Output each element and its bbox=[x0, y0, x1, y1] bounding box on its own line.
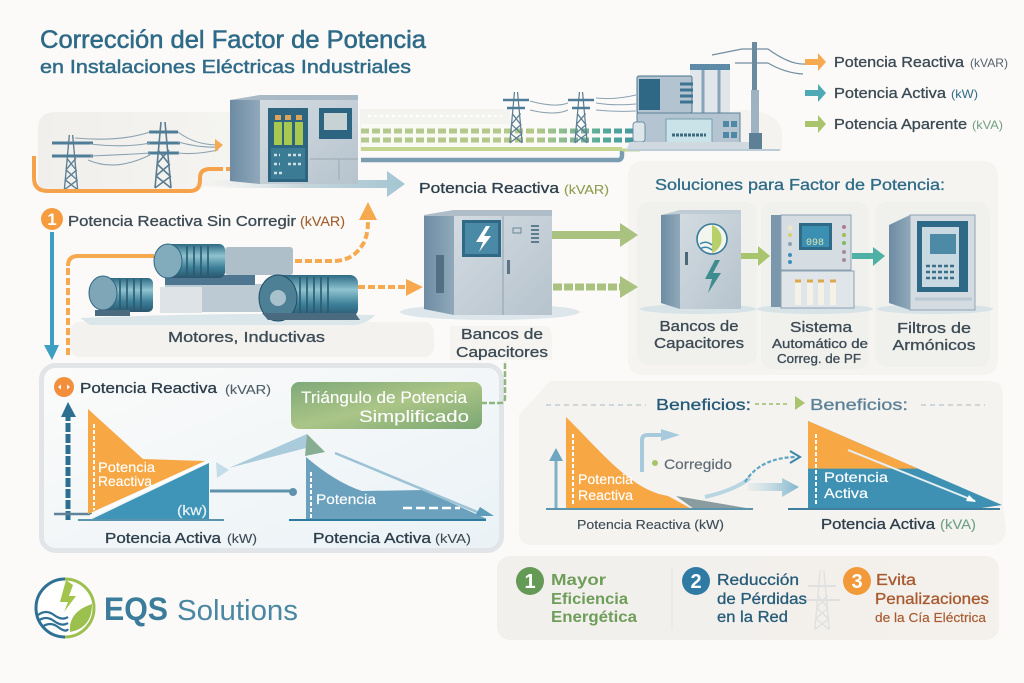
arrow: orange motor feed bbox=[68, 256, 154, 355]
title: en Instalaciones Eléctricas Industriales bbox=[40, 56, 411, 77]
panel: key benefits bbox=[497, 556, 999, 640]
callout: simplified triangle: Triángulo de Potencia bbox=[301, 389, 468, 407]
arrow: light blue up bbox=[640, 429, 680, 472]
chart: corrected triangle: Potencia bbox=[316, 491, 376, 507]
card labels: Automático de bbox=[772, 337, 868, 351]
arrow: solid green to solutions bbox=[552, 223, 638, 247]
label: capacitor banks bbox=[450, 326, 552, 361]
arrow: orange reactive flow bbox=[34, 156, 245, 191]
legend label: active: Potencia Activa bbox=[834, 86, 947, 102]
panel: power triangle bbox=[42, 361, 505, 550]
title bbox=[40, 26, 426, 77]
arrow: dashed curve bbox=[705, 451, 800, 497]
heading: reactive power: Potencia Reactiva bbox=[80, 381, 218, 397]
chart: uncorrected triangle: Potencia bbox=[98, 459, 155, 475]
heading: benefits: Beneficios: bbox=[810, 397, 908, 414]
chart: before: Potencia bbox=[578, 471, 633, 487]
axis labels: (kVA) bbox=[435, 531, 471, 546]
axis labels bbox=[577, 517, 976, 533]
benefit 1 bbox=[516, 567, 637, 626]
axis labels bbox=[105, 531, 471, 547]
chart: uncorrected triangle bbox=[78, 409, 224, 520]
benefit 3: de la Cía Eléctrica bbox=[875, 610, 987, 625]
arrow: dashed orange to capacitors bbox=[358, 279, 423, 296]
icon: motors bbox=[80, 244, 375, 325]
legend arrow: reactive bbox=[805, 53, 826, 71]
benefit 2: de Pérdidas bbox=[717, 591, 807, 608]
dashed connector bbox=[481, 361, 505, 403]
axis labels: Potencia Reactiva (kW) bbox=[577, 517, 724, 532]
chart: corrected triangle bbox=[289, 453, 494, 520]
badge and heading: uncorrected reactive power bbox=[41, 208, 345, 230]
icon: distant towers bbox=[503, 92, 636, 143]
arrow: grey flow to reactive power bbox=[200, 171, 405, 197]
arrow: blue down bbox=[44, 232, 59, 360]
chart: after: Potencia bbox=[824, 469, 888, 485]
arrow: dashed orange to main panel bbox=[295, 202, 377, 261]
label: reactive power top: (kVAR) bbox=[564, 182, 609, 197]
panel: benefits charts bbox=[519, 381, 1006, 545]
icon: capacitor bank cabinet bbox=[400, 210, 580, 320]
legend label: active: (kW) bbox=[951, 87, 978, 101]
heading: benefits bbox=[546, 396, 985, 414]
label: reactive power top: Potencia Reactiva bbox=[419, 181, 560, 197]
axis labels: Potencia Activa bbox=[105, 531, 222, 547]
chart: after: Activa bbox=[824, 485, 868, 501]
benefit 2 bbox=[672, 567, 807, 630]
chart: uncorrected triangle: Reactiva bbox=[98, 473, 152, 489]
card labels: Sistema bbox=[790, 320, 853, 336]
connector arrow bbox=[210, 434, 325, 496]
legend label: active bbox=[834, 86, 978, 102]
heading: solutions: Soluciones para Factor de Potencia: bbox=[655, 177, 945, 194]
badge and heading: uncorrected reactive power: 1 bbox=[47, 210, 57, 229]
benefit 3: 3 bbox=[851, 571, 863, 593]
heading: benefits: Beneficios: bbox=[656, 397, 751, 414]
panel: motors caption bbox=[70, 322, 434, 357]
flow stripes: green power line bbox=[360, 109, 650, 160]
title: Corrección del Factor de Potencia bbox=[40, 26, 426, 54]
decorative icon: tower bbox=[804, 570, 840, 629]
benefit 3: Evita bbox=[876, 572, 916, 589]
card labels: Bancos de bbox=[660, 319, 738, 335]
logo: EQS Solutions: EQS bbox=[104, 591, 168, 627]
icon: main switchgear cabinet bbox=[230, 95, 358, 184]
card labels: Correg. de PF bbox=[777, 352, 861, 366]
label: capacitor banks: Bancos de bbox=[461, 327, 543, 343]
card labels: Filtros de bbox=[897, 321, 971, 337]
legend arrow: active bbox=[805, 84, 826, 102]
card: harmonic filters bbox=[875, 202, 993, 367]
heading: reactive power bbox=[54, 377, 271, 397]
chart: before bbox=[546, 417, 753, 509]
arrow: teal between cards bbox=[852, 247, 885, 266]
card labels bbox=[654, 319, 976, 366]
callout: simplified triangle: Simplificado bbox=[359, 408, 469, 426]
badge and heading: uncorrected reactive power: (kVAR) bbox=[300, 214, 345, 229]
card labels: Armónicos bbox=[892, 338, 976, 354]
chart: uncorrected triangle: (kw) bbox=[177, 502, 207, 518]
label: corrected: Corregido bbox=[664, 456, 732, 472]
legend arrow: apparent bbox=[805, 115, 826, 133]
label: capacitor banks: Capacitores bbox=[456, 345, 548, 361]
axis arrow bbox=[54, 402, 92, 520]
legend label: apparent: Potencia Aparente bbox=[834, 117, 967, 133]
benefit 3: Penalizaciones bbox=[875, 591, 989, 608]
logo: EQS Solutions bbox=[36, 579, 298, 637]
legend label: reactive bbox=[834, 55, 1008, 71]
label: reactive power top bbox=[419, 181, 609, 197]
axis labels: (kVA) bbox=[940, 517, 976, 532]
icon: industrial plant and utility pole bbox=[626, 42, 805, 150]
card: automatic correction bbox=[757, 202, 873, 369]
legend bbox=[805, 53, 1008, 133]
benefit 1: Eficiencia bbox=[551, 591, 628, 608]
panel: power line input bbox=[34, 112, 245, 192]
arrow: blue gradient bbox=[748, 478, 799, 497]
heading: reactive power: (kVAR) bbox=[225, 383, 271, 397]
legend label: reactive: Potencia Reactiva bbox=[834, 55, 965, 71]
logo: EQS Solutions: Solutions bbox=[177, 595, 298, 627]
legend label: reactive: (kVAR) bbox=[970, 56, 1008, 70]
panel: motors caption: Motores, Inductivas bbox=[168, 330, 325, 346]
callout: simplified triangle bbox=[291, 382, 482, 429]
benefit 1: 1 bbox=[524, 571, 536, 593]
arrow: dashed green to solutions bbox=[553, 276, 638, 298]
benefit 3 bbox=[843, 567, 989, 625]
legend label: apparent: (kVA) bbox=[972, 118, 1003, 132]
benefit 2: 2 bbox=[690, 571, 702, 593]
chart: before: Reactiva bbox=[578, 487, 633, 503]
badge and heading: uncorrected reactive power: Potencia Reactiva Sin Corregir bbox=[68, 214, 296, 230]
benefit 1: Energética bbox=[551, 609, 637, 626]
arrow: green between cards bbox=[741, 246, 770, 266]
axis labels: (kW) bbox=[227, 532, 257, 546]
card: automatic correction: 098 bbox=[806, 238, 824, 249]
card labels: Capacitores bbox=[654, 336, 744, 352]
axis labels: Potencia Activa bbox=[313, 531, 432, 547]
benefit 2: en la Red bbox=[717, 609, 788, 626]
axis labels: Potencia Activa bbox=[821, 517, 936, 533]
chart: after bbox=[788, 421, 1002, 509]
benefit 2: Reducción bbox=[717, 572, 799, 589]
benefit 1: Mayor bbox=[551, 572, 606, 589]
panel: solutions bbox=[628, 161, 998, 375]
card: capacitor banks bbox=[637, 202, 757, 365]
icon: transmission towers bbox=[52, 122, 223, 190]
